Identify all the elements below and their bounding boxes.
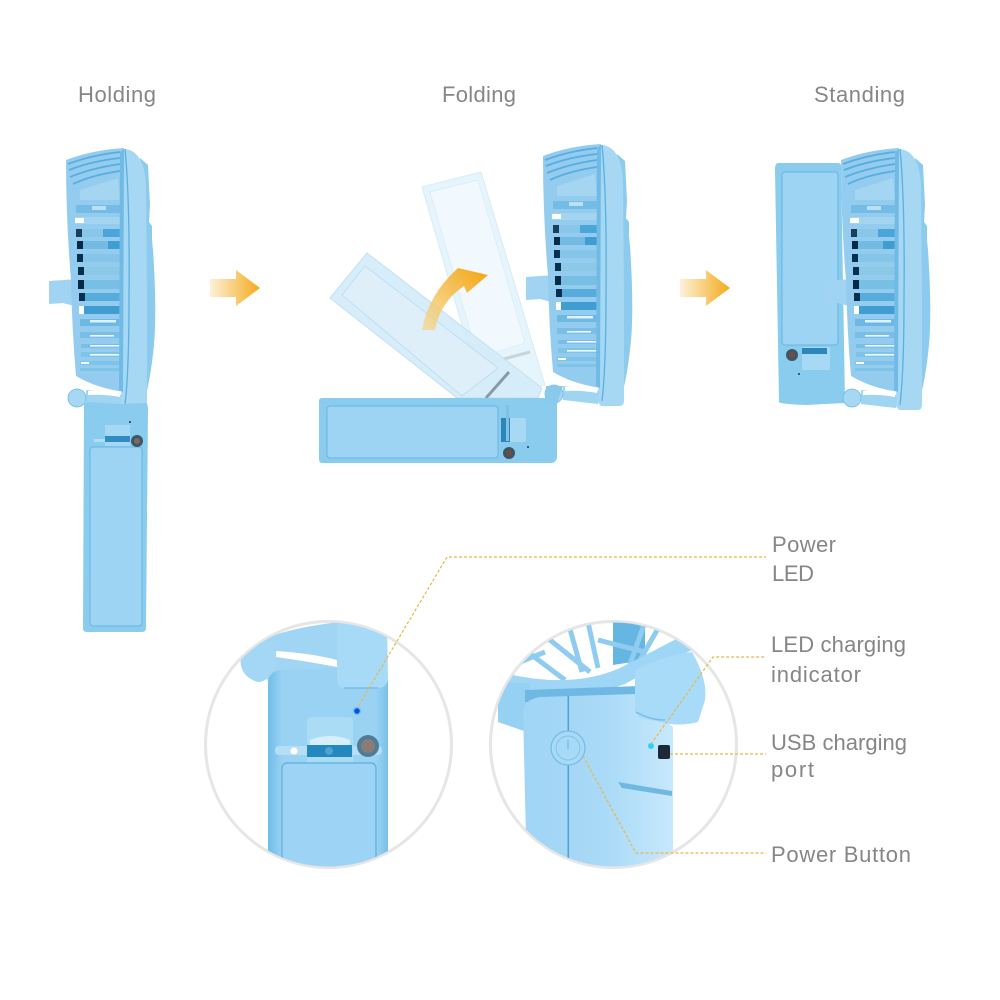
arrow: holding to folding — [210, 270, 260, 306]
label: LED charging indicator: indicator — [771, 662, 861, 687]
curved arrow — [422, 268, 488, 330]
label: Holding: Holding — [78, 82, 156, 107]
detail circle: charging side — [490, 622, 736, 880]
label: Standing: Standing — [814, 82, 905, 107]
folded handle — [775, 163, 845, 405]
infographic canvas — [49, 86, 930, 869]
label: Power LED: LED — [772, 561, 814, 586]
ghost handle upper — [422, 172, 545, 398]
label: Power Button: Power Button — [771, 842, 911, 867]
label: USB charging port: USB charging — [771, 730, 907, 755]
fan head — [49, 148, 155, 410]
open handle — [319, 386, 563, 463]
fan head — [824, 148, 930, 410]
label: LED charging indicator: LED charging — [771, 632, 906, 657]
fan and handle close-up — [498, 622, 705, 880]
blue power LED — [354, 708, 360, 714]
leader: Power Button — [583, 756, 766, 853]
label: Folding: Folding — [442, 82, 516, 107]
detail circle: power LED side — [206, 620, 452, 880]
label: Power LED: Power — [772, 532, 836, 557]
product: folding mode fan — [319, 144, 632, 463]
fan head — [526, 144, 632, 406]
ghost handle lower — [330, 253, 542, 398]
leader: LED charging indicator — [651, 657, 766, 744]
label: USB charging port: port — [771, 757, 814, 782]
arrow: folding to standing — [680, 270, 730, 306]
handle close-up — [241, 620, 388, 880]
product: holding mode fan — [49, 148, 155, 632]
leader: USB charging port — [670, 753, 766, 755]
fold-out handle — [83, 402, 148, 632]
product: standing mode fan — [775, 148, 930, 410]
leader: Power LED — [356, 557, 766, 710]
